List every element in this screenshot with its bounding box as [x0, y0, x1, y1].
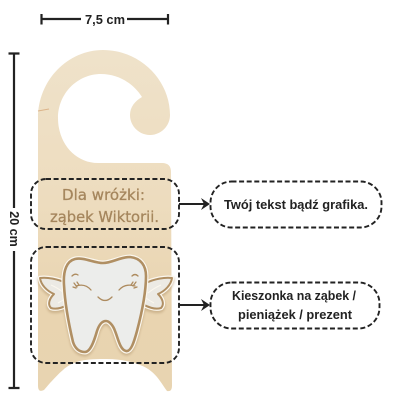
- callout: pocket: pieniążek / prezent: [238, 307, 353, 322]
- callout: pocket: [210, 282, 380, 328]
- shadow: [40, 259, 172, 354]
- dimension: width: [42, 13, 168, 27]
- left wing: [40, 278, 71, 309]
- arrow: pocket to callout: [179, 299, 210, 311]
- face: [72, 274, 138, 300]
- dimension: height: [7, 53, 21, 388]
- engraved text: ząbek Wiktorii.: [50, 208, 159, 226]
- callout: text or graphic: Twój tekst bądź grafika.: [224, 197, 368, 212]
- wood mark: [38, 109, 49, 111]
- arrow: engraving to callout: [179, 198, 210, 210]
- callout: pocket: Kieszonka na ząbek /: [232, 288, 356, 303]
- engraved text: Dla wróżki:: [62, 186, 145, 204]
- right wing: [141, 278, 172, 309]
- dashed box: engraved area: [31, 179, 179, 229]
- callout: text or graphic: [210, 182, 382, 228]
- engraved text: [50, 186, 159, 226]
- tooth decoration: [40, 257, 172, 354]
- dimension: width: 7,5 cm: [85, 13, 125, 27]
- tooth shape: [64, 257, 146, 352]
- dashed box: tooth pocket: [31, 247, 179, 363]
- door hanger body: [38, 50, 172, 391]
- dimension: height: 20 cm: [7, 211, 21, 247]
